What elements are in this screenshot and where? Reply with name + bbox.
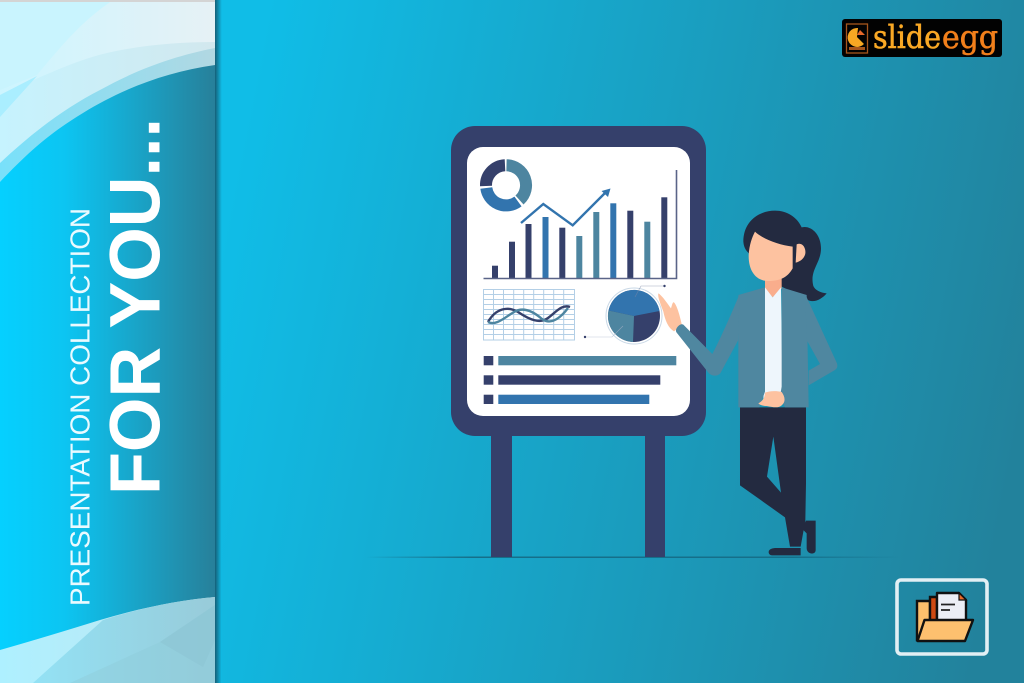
board screen bbox=[467, 147, 690, 416]
panel: presentation board bbox=[451, 126, 706, 557]
heading: presentation collection: PRESENTATION COLLECTION bbox=[64, 208, 96, 606]
board legs bbox=[491, 430, 665, 557]
jacket bbox=[738, 287, 809, 407]
logo: slideegg: slide bbox=[873, 18, 941, 56]
hair bbox=[743, 211, 827, 301]
heading: for you: FOR YOU... bbox=[96, 118, 176, 495]
bar chart bbox=[484, 170, 676, 278]
face bbox=[749, 232, 793, 281]
pie chart bbox=[584, 285, 666, 344]
left arm and hand bbox=[658, 293, 739, 376]
donut chart bbox=[486, 165, 526, 205]
ground line bbox=[365, 556, 900, 558]
logo mark bbox=[846, 24, 868, 53]
trend arrow bbox=[521, 188, 610, 225]
icon: folder with documents bbox=[897, 580, 987, 654]
figure: presenter bbox=[658, 211, 837, 555]
right arm bbox=[805, 294, 837, 385]
board frame bbox=[451, 126, 706, 436]
panel: left sidebar bbox=[0, 0, 222, 683]
neck bbox=[765, 278, 782, 297]
sidebar top wave bbox=[0, 0, 215, 182]
legend bars bbox=[484, 356, 676, 404]
pants bbox=[740, 407, 806, 547]
clasped hands bbox=[758, 391, 785, 407]
shoes bbox=[769, 521, 816, 555]
sidebar bottom wave bbox=[0, 597, 215, 683]
ear bbox=[796, 244, 805, 263]
line graph on grid bbox=[484, 290, 574, 340]
shirt bbox=[763, 287, 783, 403]
logo: slideegg: egg bbox=[942, 18, 998, 56]
logo: slideegg bbox=[842, 18, 1002, 57]
